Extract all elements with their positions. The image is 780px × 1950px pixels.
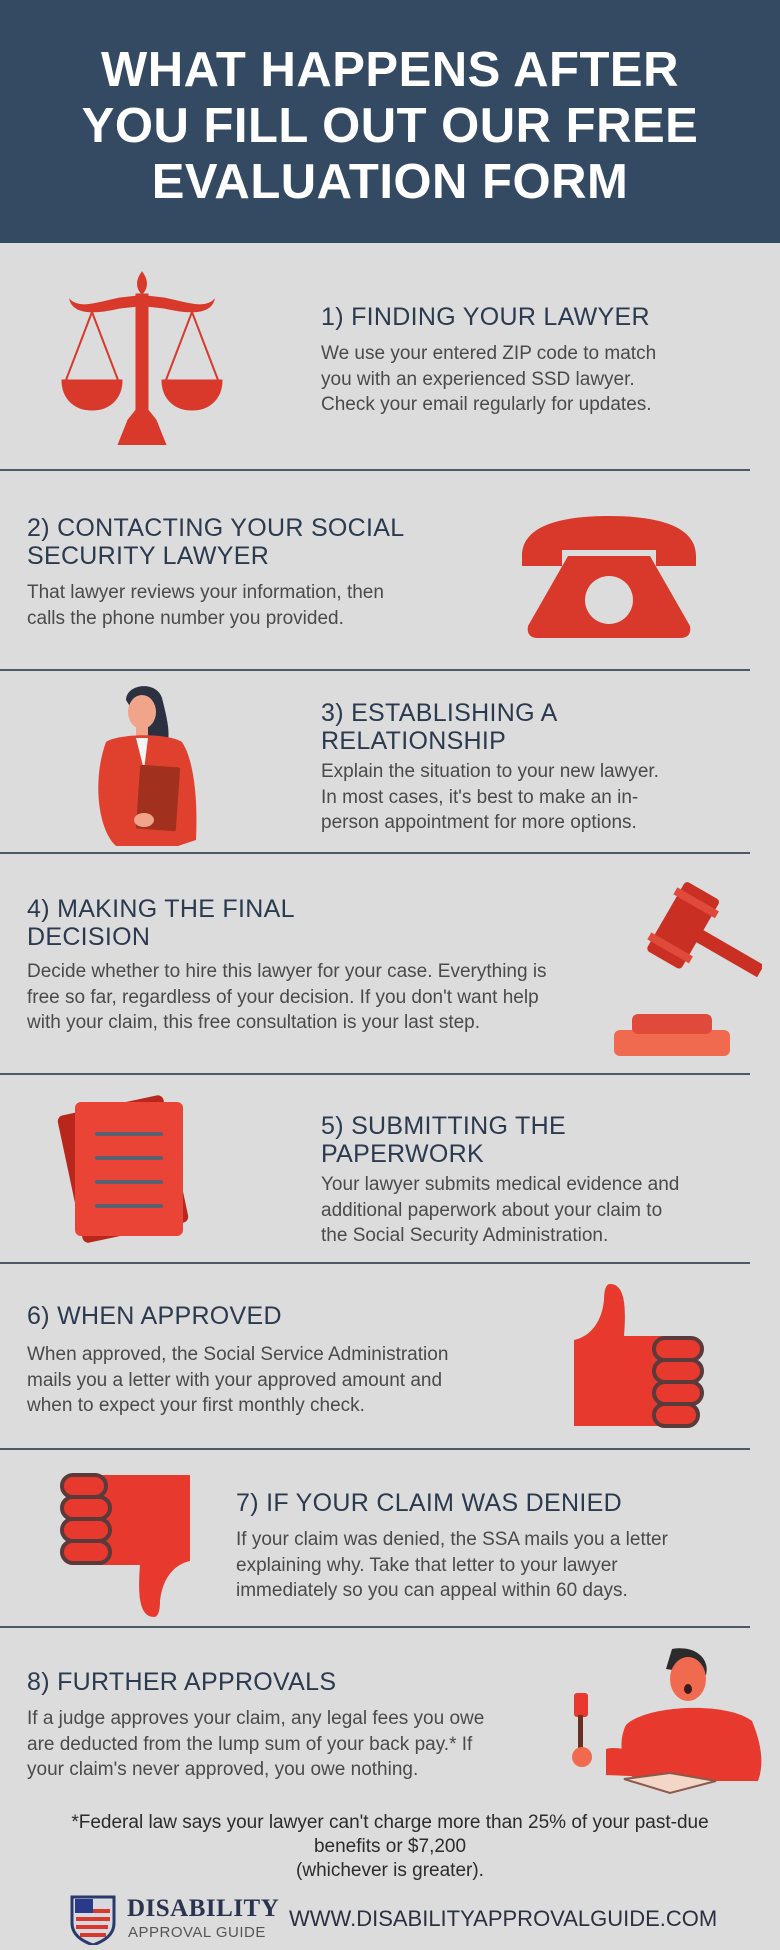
- step 8 text: If a judge approves your claim, any legal fees you owe: [27, 1708, 484, 1729]
- step 4 text: with your claim, this free consultation is your last step.: [27, 1012, 480, 1033]
- step 1 text: We use your entered ZIP code to match: [321, 343, 656, 364]
- step 6 text: mails you a letter with your approved amount and: [27, 1370, 442, 1390]
- step 6 text: when to expect your first monthly check.: [27, 1395, 365, 1416]
- title: WHAT HAPPENS AFTER: [101, 43, 679, 97]
- icon: scales of justice: [62, 271, 222, 445]
- step 2 text: calls the phone number you provided.: [27, 608, 344, 628]
- title: [82, 43, 698, 209]
- logo: DISABILITY: [127, 1895, 279, 1922]
- title: YOU FILL OUT OUR FREE: [82, 99, 698, 153]
- step 6 text: 6) WHEN APPROVED: [27, 1302, 282, 1330]
- footnote: benefits or $7,200: [314, 1836, 466, 1857]
- footnote: (whichever is greater).: [296, 1860, 484, 1881]
- icon: thumbs down: [60, 1473, 190, 1617]
- step 5 text: Your lawyer submits medical evidence and: [321, 1174, 679, 1195]
- step 7 text: immediately so you can appeal within 60 days.: [236, 1580, 628, 1601]
- step 4 text: free so far, regardless of your decision. If you don't want help: [27, 986, 539, 1008]
- step 2 text: [27, 514, 404, 628]
- step 7 text: explaining why. Take that letter to your lawyer: [236, 1554, 618, 1576]
- step 7 text: If your claim was denied, the SSA mails you a letter: [236, 1529, 668, 1550]
- step 5 text: [321, 1112, 679, 1246]
- logo: [70, 1895, 279, 1945]
- icon: thumbs up: [574, 1284, 704, 1428]
- step 5 text: PAPERWORK: [321, 1140, 484, 1168]
- step 4 text: DECISION: [27, 923, 150, 951]
- step 2 text: SECURITY LAWYER: [27, 542, 269, 570]
- step 7 text: [236, 1489, 668, 1601]
- step 1 text: you with an experienced SSD lawyer.: [321, 368, 635, 390]
- icon: papers: [58, 1095, 188, 1243]
- step 4 text: [27, 895, 547, 1033]
- footnote: *Federal law says your lawyer can't charge more than 25% of your past-due: [71, 1812, 709, 1833]
- step 3 text: [321, 699, 659, 833]
- icon: flag shield: [70, 1896, 116, 1945]
- step 2 text: 2) CONTACTING YOUR SOCIAL: [27, 514, 404, 542]
- step 8 text: 8) FURTHER APPROVALS: [27, 1668, 336, 1696]
- footnote: [71, 1812, 709, 1881]
- step 8 text: [27, 1668, 484, 1780]
- step 1 text: Check your email regularly for updates.: [321, 394, 652, 415]
- step 5 text: additional paperwork about your claim to: [321, 1200, 662, 1220]
- step 1 text: [321, 303, 656, 415]
- icon: telephone: [522, 516, 696, 638]
- header band: [0, 0, 780, 243]
- step 8 text: your claim's never approved, you owe nothing.: [27, 1759, 418, 1780]
- step 5 text: 5) SUBMITTING THE: [321, 1112, 566, 1140]
- icon: judge with gavel: [572, 1648, 762, 1794]
- title: EVALUATION FORM: [152, 155, 628, 209]
- icon: woman with folder: [98, 686, 196, 846]
- step 8 text: are deducted from the lump sum of your back pay.* If: [27, 1734, 472, 1754]
- step 3 text: In most cases, it's best to make an in-: [321, 786, 638, 808]
- step 1 text: 1) FINDING YOUR LAWYER: [321, 303, 650, 331]
- step 7 text: 7) IF YOUR CLAIM WAS DENIED: [236, 1489, 622, 1517]
- logo: APPROVAL GUIDE: [128, 1924, 266, 1941]
- step 3 text: 3) ESTABLISHING A: [321, 699, 558, 727]
- step 3 text: person appointment for more options.: [321, 812, 637, 833]
- step 6 text: [27, 1302, 448, 1416]
- step 3 text: Explain the situation to your new lawyer.: [321, 761, 659, 782]
- step 4 text: Decide whether to hire this lawyer for your case. Everything is: [27, 961, 547, 982]
- step 6 text: When approved, the Social Service Administration: [27, 1344, 448, 1365]
- step 4 text: 4) MAKING THE FINAL: [27, 895, 295, 923]
- icon: gavel: [614, 882, 762, 1056]
- website url: WWW.DISABILITYAPPROVALGUIDE.COM: [289, 1906, 717, 1931]
- step 2 text: That lawyer reviews your information, then: [27, 582, 384, 603]
- step 5 text: the Social Security Administration.: [321, 1225, 608, 1246]
- step 3 text: RELATIONSHIP: [321, 727, 506, 755]
